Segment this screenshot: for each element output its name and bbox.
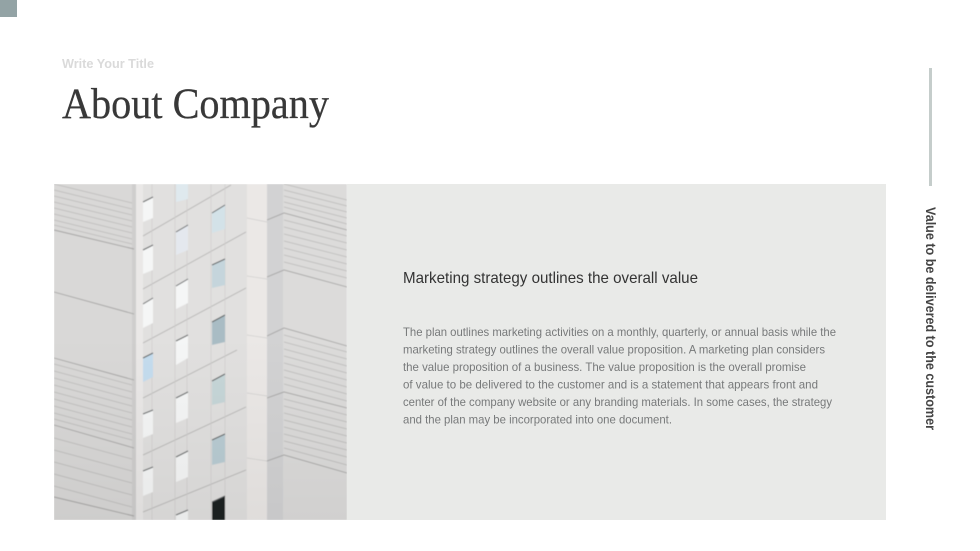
panel body text: the value proposition of a business. The value proposition is the overall promise	[403, 360, 806, 374]
panel body text: of value to be delivered to the customer and is a statement that appears front and	[403, 378, 818, 392]
eyebrow: write your title: Write Your Title	[62, 56, 154, 71]
windows	[143, 184, 225, 520]
panel heading: Marketing strategy outlines the overall value	[403, 270, 698, 287]
corner square	[0, 0, 17, 17]
panel body text: The plan outlines marketing activities on a monthly, quarterly, or annual basis while the	[403, 325, 836, 339]
panel body text: center of the company website or any branding materials. In some cases, the strategy	[403, 395, 832, 409]
text panel background	[347, 184, 886, 520]
panel body text	[403, 325, 836, 426]
photo: white high-rise building facade	[54, 184, 347, 520]
panel body text: marketing strategy outlines the overall value proposition. A marketing plan considers	[403, 342, 825, 356]
title: About Company	[62, 81, 329, 128]
vertical accent bar	[929, 68, 932, 186]
window top shadows	[143, 197, 225, 515]
panel body text: and the plan may be incorporated into one document.	[403, 412, 672, 426]
vertical caption: Value to be delivered to the customer	[923, 207, 939, 430]
